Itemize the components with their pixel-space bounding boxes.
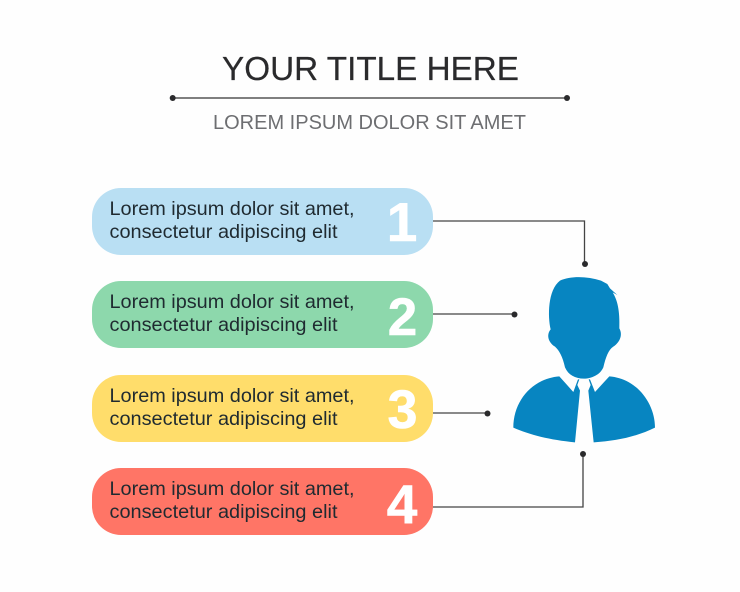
connector 2 (433, 312, 518, 318)
panel: item 2: Lorem ipsum dolor sit amet, (110, 291, 354, 313)
connector 4 (433, 451, 586, 507)
connector 3 (433, 410, 490, 416)
panel: item 1: consectetur adipiscing elit (110, 221, 338, 243)
panel: item 4: 4 (387, 473, 418, 535)
title divider (170, 95, 570, 101)
subtitle: LOREM IPSUM DOLOR SIT AMET (213, 112, 526, 134)
panel: item 2: consectetur adipiscing elit (110, 314, 338, 336)
title: YOUR TITLE HERE (222, 51, 519, 88)
panel: item 4 (92, 468, 433, 535)
panel: item 1: 1 (387, 191, 417, 253)
panel: item 2: 2 (388, 288, 417, 347)
panel: item 3: 3 (387, 380, 418, 440)
panel: item 2 (92, 281, 433, 348)
panel: item 1 (92, 188, 433, 255)
panel: item 3 (92, 375, 433, 442)
panel: item 4: Lorem ipsum dolor sit amet, (110, 478, 354, 500)
panel: item 3: Lorem ipsum dolor sit amet, (110, 385, 354, 407)
panel: item 4: consectetur adipiscing elit (110, 501, 338, 523)
panel: item 3: consectetur adipiscing elit (110, 408, 338, 430)
panel: item 1: Lorem ipsum dolor sit amet, (110, 198, 354, 220)
connector 1 (433, 221, 588, 267)
icon: person with tie (513, 277, 655, 442)
